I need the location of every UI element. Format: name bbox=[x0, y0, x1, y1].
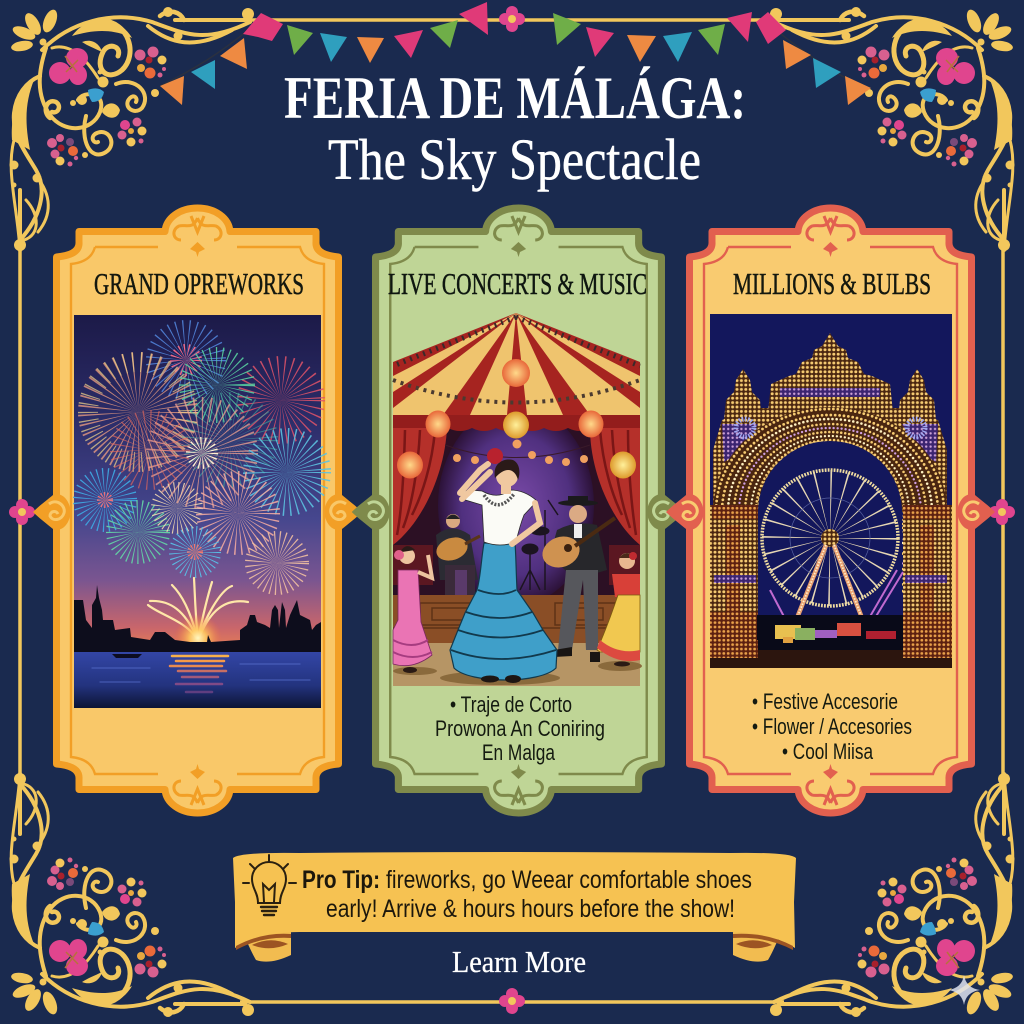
side towers bbox=[724, 369, 936, 420]
bullet list bbox=[752, 689, 912, 764]
bullet list: En Malga bbox=[482, 740, 556, 765]
sparkle mark bbox=[948, 975, 980, 1005]
panel: millions and bulbs bbox=[666, 208, 995, 813]
illustration: fireworks over city bbox=[74, 315, 321, 708]
corner ornament: bottom right bbox=[770, 773, 1014, 1017]
bullet list: • Festive Accesorie bbox=[752, 689, 898, 714]
guitarist bbox=[538, 496, 615, 662]
bullet list bbox=[435, 692, 605, 765]
ferris wheel bbox=[762, 470, 903, 628]
corner ornament: bottom left bbox=[10, 773, 254, 1017]
title bbox=[284, 65, 746, 192]
drum kit bbox=[520, 500, 558, 590]
corner ornament: top left bbox=[10, 7, 254, 251]
dancer in blue dress bbox=[450, 448, 557, 683]
girl in pink dress bbox=[393, 546, 432, 673]
illustration: light arch with ferris wheel bbox=[710, 314, 952, 668]
bullet list: Prowona An Coniring bbox=[435, 716, 605, 741]
seated musician bbox=[433, 514, 480, 595]
heading: live concerts and music: LIVE CONCERTS & MUSIC bbox=[388, 266, 647, 301]
tip text: Pro Tip: bbox=[302, 866, 380, 894]
learn more link: Learn More bbox=[452, 944, 586, 979]
panel frame: coral bbox=[666, 208, 995, 813]
illustration: flamenco stage in tent bbox=[393, 313, 642, 686]
title: FERIA DE MÁLÁGA: bbox=[284, 65, 746, 131]
tip text bbox=[302, 866, 752, 923]
heading: millions and bulbs: MILLIONS & BULBS bbox=[733, 266, 931, 301]
bullet list: • Traje de Corto bbox=[450, 692, 572, 717]
banner ribbon bbox=[233, 852, 796, 962]
panel: fireworks bbox=[33, 208, 362, 813]
panel: live concerts bbox=[352, 208, 685, 813]
bullet list: • Flower / Accesories bbox=[752, 714, 912, 739]
bullet list: • Cool Miisa bbox=[782, 739, 874, 764]
title: The Sky Spectacle bbox=[328, 127, 701, 192]
tip text: early! Arrive & hours hours before the show! bbox=[326, 895, 735, 923]
bunting flags bbox=[160, 2, 871, 105]
panel frame: green bbox=[352, 208, 685, 813]
panel frame: orange bbox=[33, 208, 362, 813]
corner ornament: top right bbox=[770, 7, 1014, 251]
heading: grand opreworks: GRAND OPREWORKS bbox=[94, 266, 304, 301]
pro tip banner bbox=[233, 852, 796, 962]
tip text: fireworks, go Weear comfortable shoes bbox=[386, 866, 752, 894]
girl in yellow dress bbox=[597, 552, 640, 666]
crown of lights bbox=[768, 333, 893, 412]
icon: light bulb bbox=[243, 855, 296, 915]
